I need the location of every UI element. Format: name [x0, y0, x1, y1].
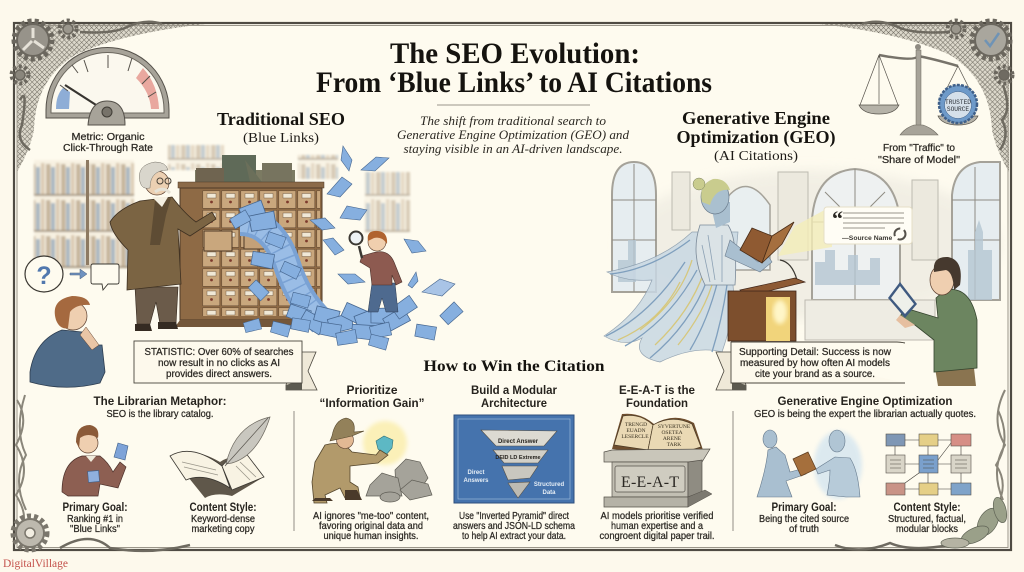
icon: book on E-E-A-T pedestal: SYVERTUNE	[658, 424, 691, 430]
text: primary goal: Primary Goal:	[62, 502, 128, 514]
subtitle: The shift from traditional search to	[420, 114, 606, 128]
icon: librarian with blue cards	[62, 425, 128, 496]
text: information gain body: favoring original data and	[319, 521, 423, 532]
icon: structured flowchart	[886, 434, 971, 495]
icon: book on E-E-A-T pedestal: TARK	[667, 442, 681, 448]
text: E-E-A-T body: AI models prioritise verified	[600, 511, 714, 522]
illustration: citation quote card: “	[832, 206, 843, 231]
icon: pile of rocks	[366, 459, 432, 502]
icon: inverted pyramid blueprint: Direct Answer	[498, 439, 539, 445]
heading: traditional SEO: (Blue Links)	[243, 131, 319, 146]
gauge label: Metric: Organic	[72, 132, 144, 143]
illustration: hall with arched windows	[612, 162, 1000, 340]
badge: trusted source: TRUSTED	[945, 99, 971, 106]
text: modular body	[453, 511, 575, 542]
icon: two figures exchanging a book	[757, 430, 862, 499]
icon: inverted pyramid blueprint: Structured	[534, 482, 564, 488]
icon: book on E-E-A-T pedestal: E-E-A-T	[621, 474, 679, 491]
text: GEO content style	[888, 502, 966, 535]
illustration: card catalog cabinet	[175, 155, 324, 327]
illustration: man reading tablet	[888, 257, 977, 386]
banner: statistic: STATISTIC: Over 60% of searches	[144, 347, 294, 358]
text: GEO primary goal	[759, 502, 849, 535]
icon: inverted pyramid blueprint: Answers	[463, 478, 489, 484]
watermark: DigitalVillage	[3, 556, 68, 570]
gear: left small	[12, 66, 28, 84]
text: modular body: Use "Inverted Pyramid" direct	[459, 511, 569, 522]
gear: top left large	[14, 21, 52, 59]
gear: bottom left	[13, 516, 47, 550]
column heading: information gain: “Information Gain”	[320, 398, 424, 410]
text: modular body: to help AI extract your data.	[462, 531, 566, 542]
heading: generative engine optimization: Generative Engine	[682, 108, 830, 128]
subtitle	[397, 114, 630, 156]
text: E-E-A-T body: human expertise and a	[611, 521, 703, 532]
text: E-E-A-T body: congroent digital paper trail.	[600, 531, 714, 542]
subtitle: staying visible in an AI-driven landscape.	[404, 142, 622, 156]
illustration: AI woman flowing dress	[604, 178, 772, 362]
banner: statistic	[134, 341, 317, 390]
heading: generative engine optimization: (AI Citations)	[714, 149, 798, 164]
text: information gain body: AI ignores "me-too" content,	[313, 511, 429, 522]
heading: how to win the citation: How to Win the Citation	[424, 358, 605, 375]
gear: top left small	[60, 20, 76, 38]
illustration: bookshelves right	[168, 145, 410, 232]
title	[316, 37, 712, 99]
title divider	[437, 104, 590, 106]
title: The SEO Evolution:	[390, 37, 640, 70]
text: content style: Content Style:	[190, 502, 256, 514]
text: content style: Keyword-dense	[191, 514, 255, 525]
illustration: flying papers	[310, 146, 455, 296]
heading: generative engine optimization: Optimization (GEO)	[676, 127, 836, 147]
illustration: thinking man	[30, 296, 105, 387]
icon: book on E-E-A-T pedestal: OSETEA	[661, 430, 683, 436]
icon: explorer with gem and rocks	[312, 418, 407, 503]
icon: inverted pyramid blueprint	[454, 415, 574, 503]
text: GEO primary goal: of truth	[789, 524, 819, 535]
banner: supporting detail: Supporting Detail: Success is now	[739, 347, 892, 358]
banner: statistic: now result in no clicks as AI	[158, 358, 280, 369]
text: GEO content style: Structured, factual,	[888, 514, 966, 525]
title: From ‘Blue Links’ to AI Citations	[316, 66, 712, 99]
banner: statistic: provides direct answers.	[166, 369, 272, 380]
illustration: pile of paper	[243, 295, 464, 351]
icon: inverted pyramid blueprint: Data	[542, 490, 556, 496]
subtitle: Generative Engine Optimization (GEO) and	[397, 128, 630, 142]
section: generative engine optimization: GEO is being the expert the librarian actually quotes.	[754, 409, 976, 420]
scales label: "Share of Model"	[878, 155, 960, 166]
column heading: information gain: Prioritize	[346, 385, 398, 397]
text: modular body: answers and JSON-LD schema	[453, 521, 575, 532]
text: primary goal: Ranking #1 in	[67, 514, 123, 525]
text: information gain body	[313, 511, 429, 542]
text: GEO content style: Content Style:	[894, 502, 960, 514]
arrow: question to answer	[70, 269, 87, 279]
text: GEO content style: modular blocks	[896, 524, 958, 535]
scales label	[878, 143, 960, 166]
column heading: E-E-A-T	[619, 385, 695, 410]
illustration: light beam from book	[778, 206, 832, 256]
text: GEO primary goal: Primary Goal:	[772, 502, 836, 514]
heading: traditional SEO: Traditional SEO	[217, 109, 345, 129]
text: content style	[190, 502, 256, 535]
icon: book on E-E-A-T pedestal: EUADN	[626, 428, 646, 434]
heading: generative engine optimization	[676, 108, 836, 164]
text: information gain body: unique human insights.	[324, 531, 418, 542]
icon: book on E-E-A-T pedestal	[604, 414, 712, 507]
illustration: citation quote card: —Source Name	[842, 235, 892, 242]
gauge label: Click-Through Rate	[63, 143, 153, 154]
column heading: E-E-A-T: Foundation	[626, 398, 688, 410]
column heading: modular architecture	[471, 385, 558, 410]
section: generative engine optimization: Generative Engine Optimization	[778, 396, 952, 408]
column heading: modular architecture: Build a Modular	[471, 385, 558, 397]
illustration: old librarian	[110, 162, 216, 331]
column heading: E-E-A-T: E-E-A-T is the	[619, 385, 695, 397]
banner: supporting detail: cite your brand as a source.	[755, 369, 875, 380]
gauge: organic click-through rate	[46, 47, 169, 125]
illustration: boy with magnifying glass	[350, 231, 402, 312]
text: GEO primary goal: Being the cited source	[759, 514, 849, 525]
illustration: bookshelves left	[34, 160, 134, 268]
text: primary goal: "Blue Links"	[70, 524, 120, 535]
icon: book on E-E-A-T pedestal: TRENGD	[625, 422, 647, 428]
illustration: question speech bubble: ?	[36, 262, 52, 290]
illustration: cascade of blue links	[229, 200, 322, 322]
illustration: question speech bubble	[25, 256, 63, 292]
icon: open book with quill	[170, 417, 270, 498]
text: primary goal	[62, 502, 128, 535]
scales of justice	[859, 44, 978, 135]
banner: supporting detail: measured by how often AI models	[740, 358, 890, 369]
gear: top right small	[948, 20, 964, 38]
badge: trusted source	[939, 85, 977, 123]
text: E-E-A-T body	[600, 511, 714, 542]
gear: top right large	[972, 21, 1010, 59]
leaves: bottom right	[941, 496, 1009, 548]
banner: supporting detail	[716, 342, 905, 390]
illustration: open brown book	[740, 222, 794, 263]
illustration: citation quote card	[824, 206, 912, 244]
illustration: lectern	[728, 260, 805, 341]
column heading: information gain	[320, 385, 424, 410]
gear: right small	[996, 66, 1012, 84]
section: the librarian metaphor: The Librarian Metaphor:	[94, 396, 226, 408]
section: generative engine optimization	[754, 396, 976, 420]
icon: book on E-E-A-T pedestal: LESERCLE	[621, 434, 649, 440]
text: content style: marketing copy	[192, 524, 254, 535]
badge: trusted source: SOURCE	[947, 106, 969, 113]
icon: book on E-E-A-T pedestal: ARENE	[663, 436, 682, 442]
gauge label	[63, 132, 153, 154]
column heading: modular architecture: Architecture	[481, 398, 547, 410]
illustration: answer speech bubble	[91, 264, 119, 290]
scales label: From "Traffic" to	[883, 143, 955, 154]
icon: inverted pyramid blueprint: DEID LD Extreme	[495, 455, 541, 461]
heading: traditional SEO	[217, 109, 345, 146]
section: the librarian metaphor: SEO is the library catalog.	[106, 409, 214, 420]
icon: inverted pyramid blueprint: Direct	[467, 470, 485, 476]
section: the librarian metaphor	[94, 396, 226, 420]
